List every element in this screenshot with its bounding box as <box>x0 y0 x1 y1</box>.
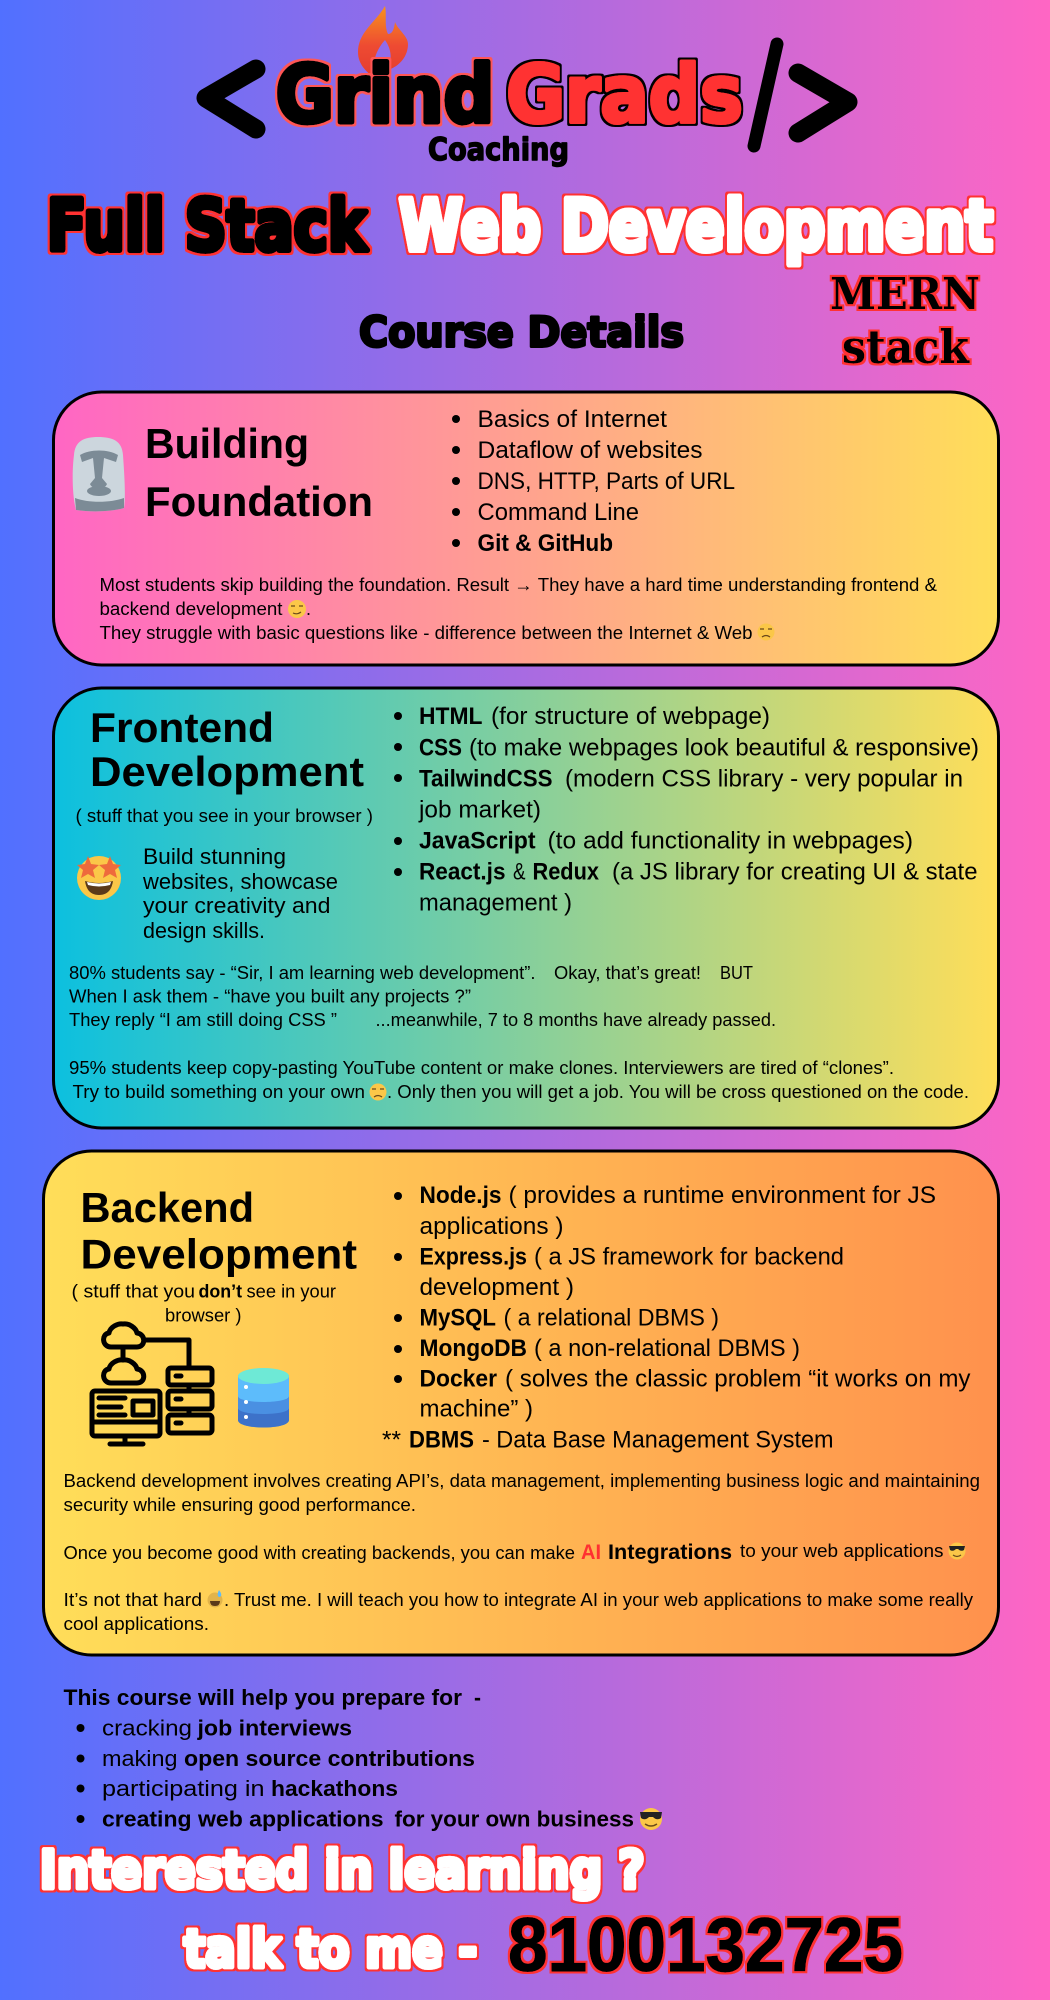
heading: Frontend Development <box>90 704 364 795</box>
bullet list: backend technologies: machine” ) <box>420 1396 533 1422</box>
title: Full Stack: Full Stack <box>47 185 368 267</box>
bullet list: benefits: participating in <box>102 1776 264 1801</box>
bullet list: foundation topics: Dataflow of websites <box>478 437 702 464</box>
bullet list: backend technologies: ( solves the classic problem “it works on my <box>505 1366 970 1392</box>
text block: build stunning websites: Build stunning <box>143 844 286 869</box>
bullet list: frontend technologies: job market) <box>418 796 541 824</box>
subheading: browser note: ( stuff that you see in your browser ) <box>76 806 373 826</box>
text block: AI integrations: Integrations <box>608 1541 732 1564</box>
text block: AI integrations <box>64 1541 966 1564</box>
text block: build stunning websites <box>142 844 338 943</box>
icon: moai <box>73 437 125 511</box>
section: course benefits <box>64 1685 662 1832</box>
bullet list: foundation topics: Basics of Internet <box>478 406 667 433</box>
text: DBMS definition: ** <box>382 1426 401 1454</box>
icon: right angle bracket <box>798 73 848 133</box>
panel card <box>44 1151 998 1655</box>
bullet list: benefits: for your own business <box>394 1806 634 1832</box>
text block: student story: ...meanwhile, 7 to 8 months have already passed. <box>376 1010 776 1030</box>
panel card <box>54 688 998 1128</box>
heading: Frontend Development: Frontend <box>90 704 274 751</box>
bullet list: foundation topics: DNS, HTTP, Parts of URL <box>478 468 735 495</box>
text block: foundation note <box>100 575 937 643</box>
logo: GrindGrads Coaching <box>206 6 848 168</box>
text block: reassurance: cool applications. <box>64 1614 209 1634</box>
panel card <box>54 392 998 665</box>
text block: clones warning <box>69 1058 969 1102</box>
bullet list: backend technologies: MySQL <box>420 1304 496 1332</box>
icon: left angle bracket <box>206 69 256 129</box>
label word: stack: stack <box>842 320 970 374</box>
bullet list: benefits <box>76 1716 662 1832</box>
subheading: browser note: don’t <box>198 1282 242 1302</box>
icon: flame <box>358 6 408 78</box>
bullet list: benefits: hackathons <box>271 1776 398 1801</box>
icon: slash <box>754 44 777 146</box>
heading: Building Foundation <box>145 420 373 525</box>
bullet list: foundation topics <box>452 406 735 557</box>
text block: student story: When I ask them - “have you built any projects ?” <box>69 986 471 1006</box>
heading: Course Details: Course Details <box>359 308 684 356</box>
bullet list: frontend technologies <box>394 703 979 916</box>
bullet list: benefits: making <box>102 1746 178 1771</box>
bullet list: frontend technologies: JavaScript <box>419 828 536 854</box>
bullet list: benefits: cracking <box>102 1716 192 1740</box>
bullet list: frontend technologies: management ) <box>419 890 572 916</box>
text block: reassurance: It’s not that hard <box>64 1590 202 1610</box>
logo word: Coaching: Coaching <box>428 132 569 168</box>
icon: database <box>238 1368 289 1428</box>
icon: cloud servers and monitor <box>92 1324 212 1444</box>
text block: foundation note: They struggle with basic questions like - difference between the Internet & Web <box>100 623 752 643</box>
bullet list: benefits: open source contributions <box>184 1746 475 1771</box>
bullet list: backend technologies: Node.js <box>420 1182 502 1209</box>
bullet list: foundation topics: Command Line <box>478 499 639 526</box>
bullet list: frontend technologies: (for structure of webpage) <box>491 703 770 730</box>
text block: backend description: security while ensuring good performance. <box>64 1495 416 1515</box>
subheading: browser note: browser ) <box>165 1306 242 1326</box>
text block: foundation note: Most students skip building the foundation. Result → They have a hard time understanding frontend & <box>100 575 937 595</box>
subheading: browser note: ( stuff that you <box>72 1282 195 1302</box>
heading: Building Foundation: Building <box>145 420 309 467</box>
text block: student story: Okay, that’s great! <box>554 963 701 983</box>
text block: student story: They reply “I am still doing CSS ” <box>69 1010 337 1030</box>
text block: backend description: Backend development involves creating API’s, data management, implementing business logic and maintaining <box>64 1471 980 1491</box>
text block: student story: 80% students say - “Sir, I am learning web development”. <box>69 963 536 983</box>
bullet list: frontend technologies: & <box>513 858 526 886</box>
call to action: Interested in learning: Interested in learning ? <box>40 1840 645 1901</box>
icon: star-struck emoji <box>77 856 121 900</box>
text block: AI integrations: Once you become good with creating backends, you can make <box>64 1543 575 1563</box>
bullet list: frontend technologies: (to make webpages look beautiful & responsive) <box>469 734 979 762</box>
heading: Backend Development: Backend <box>80 1184 254 1231</box>
text block: build stunning websites: websites, showcase <box>142 869 338 894</box>
bullet list: backend technologies: ( a relational DBMS ) <box>504 1304 719 1332</box>
heading: Backend Development: Development <box>80 1230 357 1278</box>
text block: build stunning websites: design skills. <box>143 918 265 943</box>
bullet list: frontend technologies: HTML <box>419 703 482 730</box>
text block: reassurance: . Trust me. I will teach you how to integrate AI in your web applications to make some really <box>224 1590 973 1610</box>
subheading: browser note <box>72 1282 336 1326</box>
logo word: Grads: Grads <box>506 49 743 141</box>
label word: MERN: MERN <box>830 269 980 320</box>
bullet list: backend technologies: development ) <box>420 1274 574 1301</box>
text: DBMS definition: - Data Base Management System <box>482 1426 834 1454</box>
panel: Building Foundation <box>54 392 998 665</box>
panel: Backend Development <box>44 1151 998 1655</box>
bullet list: frontend technologies: (to add functionality in webpages) <box>548 828 913 854</box>
bullet list: backend technologies: MongoDB <box>420 1335 527 1362</box>
text block: backend description <box>64 1471 980 1515</box>
text block: build stunning websites: your creativity and <box>143 893 330 918</box>
text block: student story: BUT <box>720 963 753 983</box>
bullet list: frontend technologies: React.js <box>419 858 506 886</box>
bullet list: benefits: job interviews <box>196 1716 352 1740</box>
bullet list: backend technologies: ( a JS framework for backend <box>534 1244 844 1270</box>
label: MERN stack <box>830 269 980 374</box>
logo word: Grind: Grind <box>276 49 494 141</box>
bullet list: frontend technologies: (a JS library for creating UI & state <box>612 858 978 886</box>
text: DBMS definition: DBMS <box>409 1426 474 1454</box>
phone number: 8100132725 <box>508 1903 903 1988</box>
bullet list: backend technologies: Express.js <box>420 1244 527 1270</box>
text block: clones warning: 95% students keep copy-pasting YouTube content or make clones. Interviewers are tired of “clones”. <box>69 1058 894 1078</box>
bullet list: backend technologies: ( provides a runtime environment for JS <box>508 1182 936 1209</box>
text block: foundation note: backend development <box>100 599 282 619</box>
text block: clones warning: Try to build something on your own <box>72 1082 365 1102</box>
bullet list: backend technologies: applications ) <box>420 1213 564 1240</box>
heading: Building Foundation: Foundation <box>145 478 373 525</box>
bullet list: benefits: creating web applications <box>102 1806 384 1832</box>
panel: Frontend Development <box>54 688 998 1128</box>
bullet list: foundation topics: Git & GitHub <box>478 530 613 557</box>
text block: foundation note: . <box>306 599 311 619</box>
heading: Backend Development <box>80 1184 357 1278</box>
bullet list: backend technologies: Docker <box>420 1366 497 1392</box>
text block: reassurance <box>64 1590 973 1634</box>
subheading: browser note: see in your <box>246 1282 336 1302</box>
bullet list: frontend technologies: (modern CSS library - very popular in <box>565 766 963 792</box>
heading: course helps prepare for: - <box>474 1685 481 1710</box>
call to action: talk to me: talk to me - <box>184 1919 477 1980</box>
bullet list: backend technologies: ( a non-relational DBMS ) <box>534 1335 800 1362</box>
text block: AI integrations: to your web applications <box>740 1541 944 1561</box>
bullet list: frontend technologies: Redux <box>532 858 600 886</box>
text block: student story <box>69 963 776 1030</box>
heading: Frontend Development: Development <box>90 748 364 795</box>
bullet list: frontend technologies: CSS <box>419 734 462 762</box>
text block: AI integrations: AI <box>581 1541 601 1564</box>
bullet list: backend technologies <box>394 1182 970 1422</box>
heading: course helps prepare for: This course will help you prepare for <box>64 1685 462 1710</box>
text block: clones warning: . Only then you will get a job. You will be cross questioned on the code. <box>387 1082 969 1102</box>
bullet list: frontend technologies: TailwindCSS <box>419 766 552 792</box>
